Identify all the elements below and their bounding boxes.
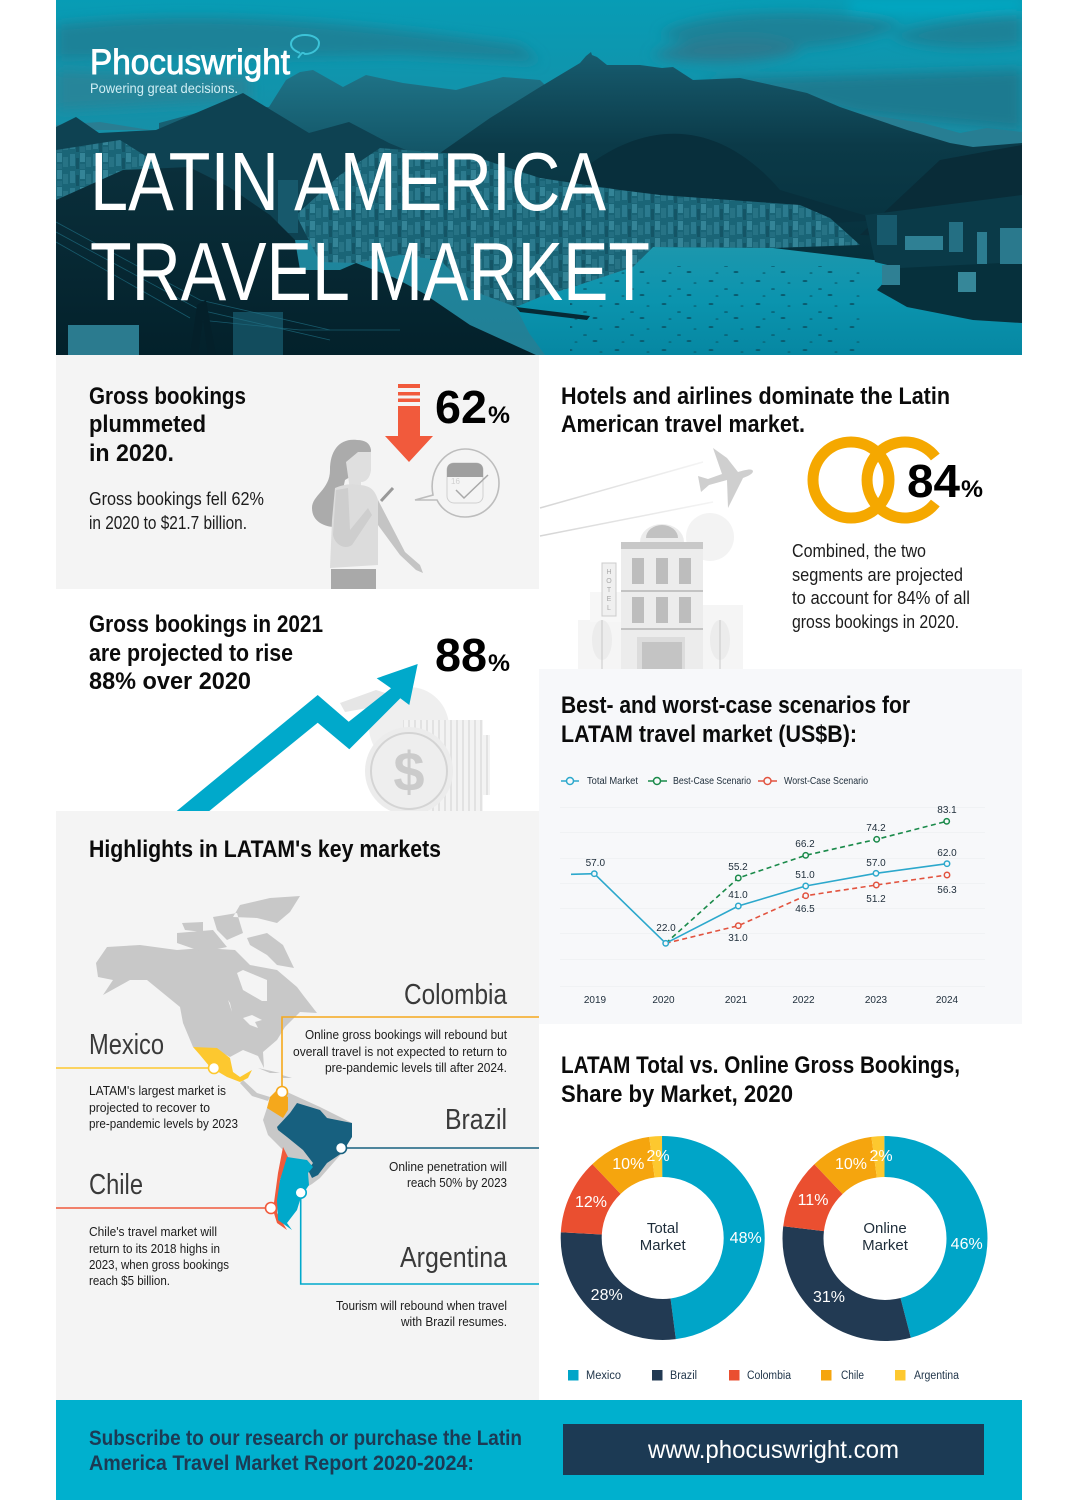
logo: Phocuswright: Phocuswright (90, 43, 290, 82)
donut legend: Colombia (747, 1370, 792, 1382)
donut chart: total market: 2% (646, 1148, 670, 1165)
line chart: 2021 (725, 995, 748, 1006)
donut chart: total market: 28% (591, 1287, 623, 1304)
illustration: airplane with contrails (540, 448, 753, 536)
callout: Brazil: Brazil (445, 1104, 507, 1136)
chart legend: Best-Case Scenario (673, 776, 751, 787)
header: hero photo banner with title (56, 0, 1022, 355)
donut chart: total market (575, 1148, 762, 1320)
callout: Mexico (56, 1029, 238, 1131)
donut chart: online market: 31% (813, 1289, 845, 1306)
donut chart: total market: Market (640, 1237, 686, 1254)
donut legend: Chile (841, 1370, 864, 1382)
stat: 88%: 88 (435, 629, 487, 681)
hero background: Rio de Janeiro landscape (56, 0, 1022, 355)
icon: red down arrow (385, 384, 433, 462)
button: website: www.phocuswright.com (647, 1436, 899, 1464)
callout: Brazil: reach 50% by 2023 (407, 1175, 507, 1190)
footer text: subscribe call to action: America Travel Market Report 2020-2024: (89, 1452, 474, 1475)
donut legend: Argentina (914, 1370, 960, 1382)
line chart: 62.0 (937, 848, 957, 859)
callout: Mexico: projected to recover to (89, 1100, 210, 1115)
icon: rising teal arrow (177, 664, 418, 811)
donut chart: online market: Market (862, 1237, 909, 1254)
map: South America (263, 1092, 352, 1190)
donut chart: total market: Total (647, 1220, 679, 1237)
callout: Mexico: LATAM's largest market is (89, 1083, 226, 1098)
heading: total vs online (561, 1052, 960, 1108)
panel: best and worst case line chart (539, 669, 1022, 1024)
heading: scenarios: Best- and worst-case scenarios for (561, 692, 910, 719)
stat: 84%: % (961, 476, 983, 503)
donut legend: Mexico (586, 1370, 621, 1382)
callout: Mexico: Mexico (89, 1029, 164, 1061)
callout: Brazil (336, 1104, 539, 1190)
map: Hudson Bay and Great Lakes (228, 970, 267, 1028)
heading: plummeted: in 2020. (89, 440, 174, 467)
illustration: coins (340, 687, 490, 815)
map: Arctic islands (177, 896, 300, 968)
stat: 62% (435, 381, 510, 433)
button: website (563, 1424, 984, 1475)
footer text: subscribe call to action (89, 1427, 522, 1475)
donut legend: Brazil (670, 1370, 697, 1382)
heading: hotels and airlines: Hotels and airlines dominate the Latin (561, 383, 950, 410)
stat: 88% (435, 629, 510, 681)
map: Argentina (277, 1157, 313, 1230)
heading: hotels and airlines: American travel market. (561, 411, 805, 438)
body text: combined segments (792, 541, 970, 632)
body text: fell 62% (89, 489, 264, 533)
line chart: 31.0 (728, 933, 748, 944)
chart legend: Worst-Case Scenario (784, 776, 868, 787)
callout: Chile: return to its 2018 highs in (89, 1241, 220, 1256)
chart legend: Total Market (587, 776, 638, 787)
heading: scenarios (561, 692, 910, 748)
heading: projected to rise (89, 611, 323, 695)
donut chart: online market: 11% (798, 1192, 828, 1209)
footer: subscribe banner (56, 1400, 1022, 1500)
stat: 88%: % (488, 650, 510, 677)
illustration: woman with phone (312, 440, 423, 589)
heading: plummeted (89, 383, 246, 467)
panel: gross bookings plummeted (56, 355, 539, 589)
donut chart: online market: Online (863, 1220, 907, 1237)
callout: Colombia: Colombia (404, 979, 508, 1011)
line chart: 2023 (865, 995, 888, 1006)
body text: combined segments: Combined, the two (792, 541, 926, 561)
map: Brazil (277, 1103, 352, 1178)
line chart: 51.0 (795, 870, 815, 881)
body text: combined segments: to account for 84% of all (792, 588, 970, 608)
heading: highlights: Highlights in LATAM's key markets (89, 836, 441, 863)
line chart: 41.0 (728, 890, 748, 901)
donut chart: online market (798, 1148, 983, 1320)
icon: speech bubble with calendar: 16 (451, 477, 460, 486)
callout: Mexico: pre-pandemic levels by 2023 (89, 1116, 238, 1131)
line chart: 55.2 (728, 862, 748, 873)
map: Caribbean and Central America (240, 1068, 292, 1101)
callout: Chile: 2023, when gross bookings (89, 1257, 229, 1272)
line chart: 56.3 (937, 885, 957, 896)
heading: total vs online: Share by Market, 2020 (561, 1081, 793, 1108)
line chart: 51.2 (866, 894, 886, 905)
donut chart: online market: 2% (869, 1148, 893, 1165)
line chart (560, 805, 985, 1006)
callout: Chile: Chile's travel market will (89, 1224, 217, 1239)
panel: highlights in key markets (56, 811, 539, 1400)
heading: plummeted: plummeted (89, 411, 206, 438)
icon: interlinked gold rings (813, 442, 935, 518)
title: LATIN AMERICA (90, 135, 607, 228)
illustration: hotel building (578, 513, 743, 669)
panel: bookings projected to rise (56, 589, 539, 815)
line chart: 66.2 (795, 839, 815, 850)
stat: 62%: % (488, 402, 510, 429)
illustration: hotel building: T (607, 587, 612, 594)
heading: plummeted: Gross bookings (89, 383, 246, 410)
callout: Argentina: with Brazil resumes. (400, 1314, 507, 1329)
line chart: 57.0 (866, 858, 886, 869)
heading: total vs online: LATAM Total vs. Online Gross Bookings, (561, 1052, 960, 1079)
illustration: hotel building: H (606, 569, 612, 576)
line chart: 57.0 (586, 858, 605, 869)
donut chart: online market: 46% (951, 1236, 983, 1253)
illustration: hotel building: L (607, 605, 611, 612)
line chart: 46.5 (795, 904, 815, 915)
illustration: coins: $ (393, 740, 425, 803)
map: Chile (273, 1147, 288, 1230)
donut chart: total market: 48% (730, 1230, 762, 1247)
stat: 84%: 84 (907, 455, 960, 507)
callout: Chile: reach $5 billion. (89, 1273, 170, 1288)
callout: Brazil: Online penetration will (389, 1159, 507, 1174)
heading: projected to rise: Gross bookings in 2021 (89, 611, 323, 638)
line chart: 83.1 (937, 805, 957, 816)
callout: Argentina: Tourism will rebound when travel (336, 1298, 507, 1313)
callout: Chile (56, 1169, 276, 1288)
footer text: subscribe call to action: Subscribe to our research or purchase the Latin (89, 1427, 522, 1450)
donut chart: online market: 10% (835, 1156, 867, 1173)
callout: Colombia (276, 979, 539, 1098)
body text: combined segments: segments are projected (792, 565, 963, 585)
body text: combined segments: gross bookings in 2020. (792, 612, 959, 632)
heading: scenarios: LATAM travel market (US$B): (561, 721, 857, 748)
panel: total vs online share by market (539, 1024, 1022, 1400)
stat: 62%: 62 (435, 381, 487, 433)
logo: Phocuswright (90, 35, 319, 96)
map: North America (96, 945, 317, 1068)
icon: speech bubble with calendar (415, 449, 499, 517)
body text: fell 62%: Gross bookings fell 62% (89, 489, 264, 509)
panel: hotels and airlines (539, 355, 1022, 669)
logo: Phocuswright: Powering great decisions. (90, 81, 238, 96)
chart legend (561, 776, 868, 787)
map: Colombia (267, 1090, 288, 1118)
line chart: 2024 (936, 995, 959, 1006)
line chart: 2020 (652, 995, 675, 1006)
title: TRAVEL MARKET (90, 225, 650, 318)
callout: Argentina (295, 1187, 539, 1329)
donut chart: total market: 10% (612, 1156, 644, 1173)
stat: 84% (907, 455, 983, 507)
heading: hotels and airlines (561, 383, 950, 438)
line chart: 2022 (792, 995, 815, 1006)
illustration: hotel building: O (606, 578, 612, 585)
illustration: hotel building: E (607, 596, 612, 603)
callout: Argentina: Argentina (400, 1242, 508, 1274)
callout: Chile: Chile (89, 1169, 143, 1201)
title (92, 152, 648, 300)
heading: projected to rise: are projected to rise (89, 640, 293, 667)
donut legend (568, 1370, 960, 1382)
map: the Americas (96, 896, 352, 1230)
map: Mexico (193, 1047, 252, 1082)
line chart: 22.0 (656, 923, 676, 934)
callout: Colombia: pre-pandemic levels till after 2024. (325, 1060, 507, 1075)
heading: projected to rise: 88% over 2020 (89, 668, 251, 695)
line chart: 74.2 (866, 823, 886, 834)
callout: Colombia: overall travel is not expected to return to (293, 1044, 507, 1059)
donut chart: total market: 12% (575, 1194, 607, 1211)
body text: fell 62%: in 2020 to $21.7 billion. (89, 513, 247, 533)
callout: Colombia: Online gross bookings will rebound but (305, 1027, 507, 1042)
line chart: 2019 (584, 995, 607, 1006)
